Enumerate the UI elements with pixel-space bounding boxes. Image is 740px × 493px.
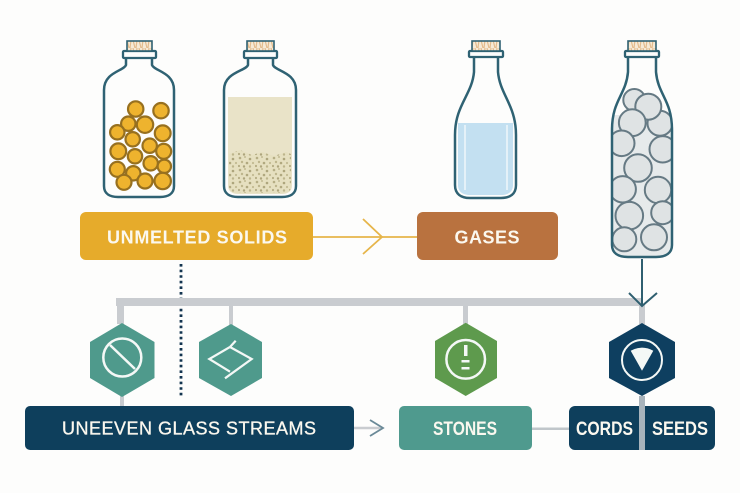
box: stones xyxy=(399,406,532,450)
bottle: grey spheres xyxy=(609,41,676,257)
connector: stones to cords xyxy=(532,428,569,430)
hexagon icon: seed in ring xyxy=(609,323,675,396)
arrow: streams to stones xyxy=(354,420,383,436)
box: cords and seeds: SEEDS xyxy=(652,418,708,440)
box: cords and seeds: CORDS xyxy=(576,418,633,440)
hexagon icon: skewed diamond xyxy=(199,324,262,396)
hexagon icon: gauge xyxy=(435,323,497,396)
bottle: blue liquid xyxy=(455,41,516,198)
bottle: sand with sediment xyxy=(224,41,296,197)
hexagon icon: prohibited xyxy=(90,323,154,397)
box: stones: STONES xyxy=(433,418,497,440)
box: uneven glass streams xyxy=(25,406,354,450)
box: unmelted solids: UNMELTED SOLIDS xyxy=(107,228,287,248)
bottle: amber spheres xyxy=(104,41,174,197)
arrow: unmelted solids to gases xyxy=(313,219,417,254)
dotted connector xyxy=(180,264,182,397)
box: unmelted solids xyxy=(80,212,313,260)
box: gases xyxy=(417,212,558,260)
box: gases: GASES xyxy=(454,228,520,248)
box: cords and seeds xyxy=(569,396,715,450)
arrow: bottle to cords and seeds xyxy=(629,259,657,306)
grey distribution bar xyxy=(116,298,645,406)
box: uneven glass streams: UNEEVEN GLASS STREAMS xyxy=(62,418,316,438)
